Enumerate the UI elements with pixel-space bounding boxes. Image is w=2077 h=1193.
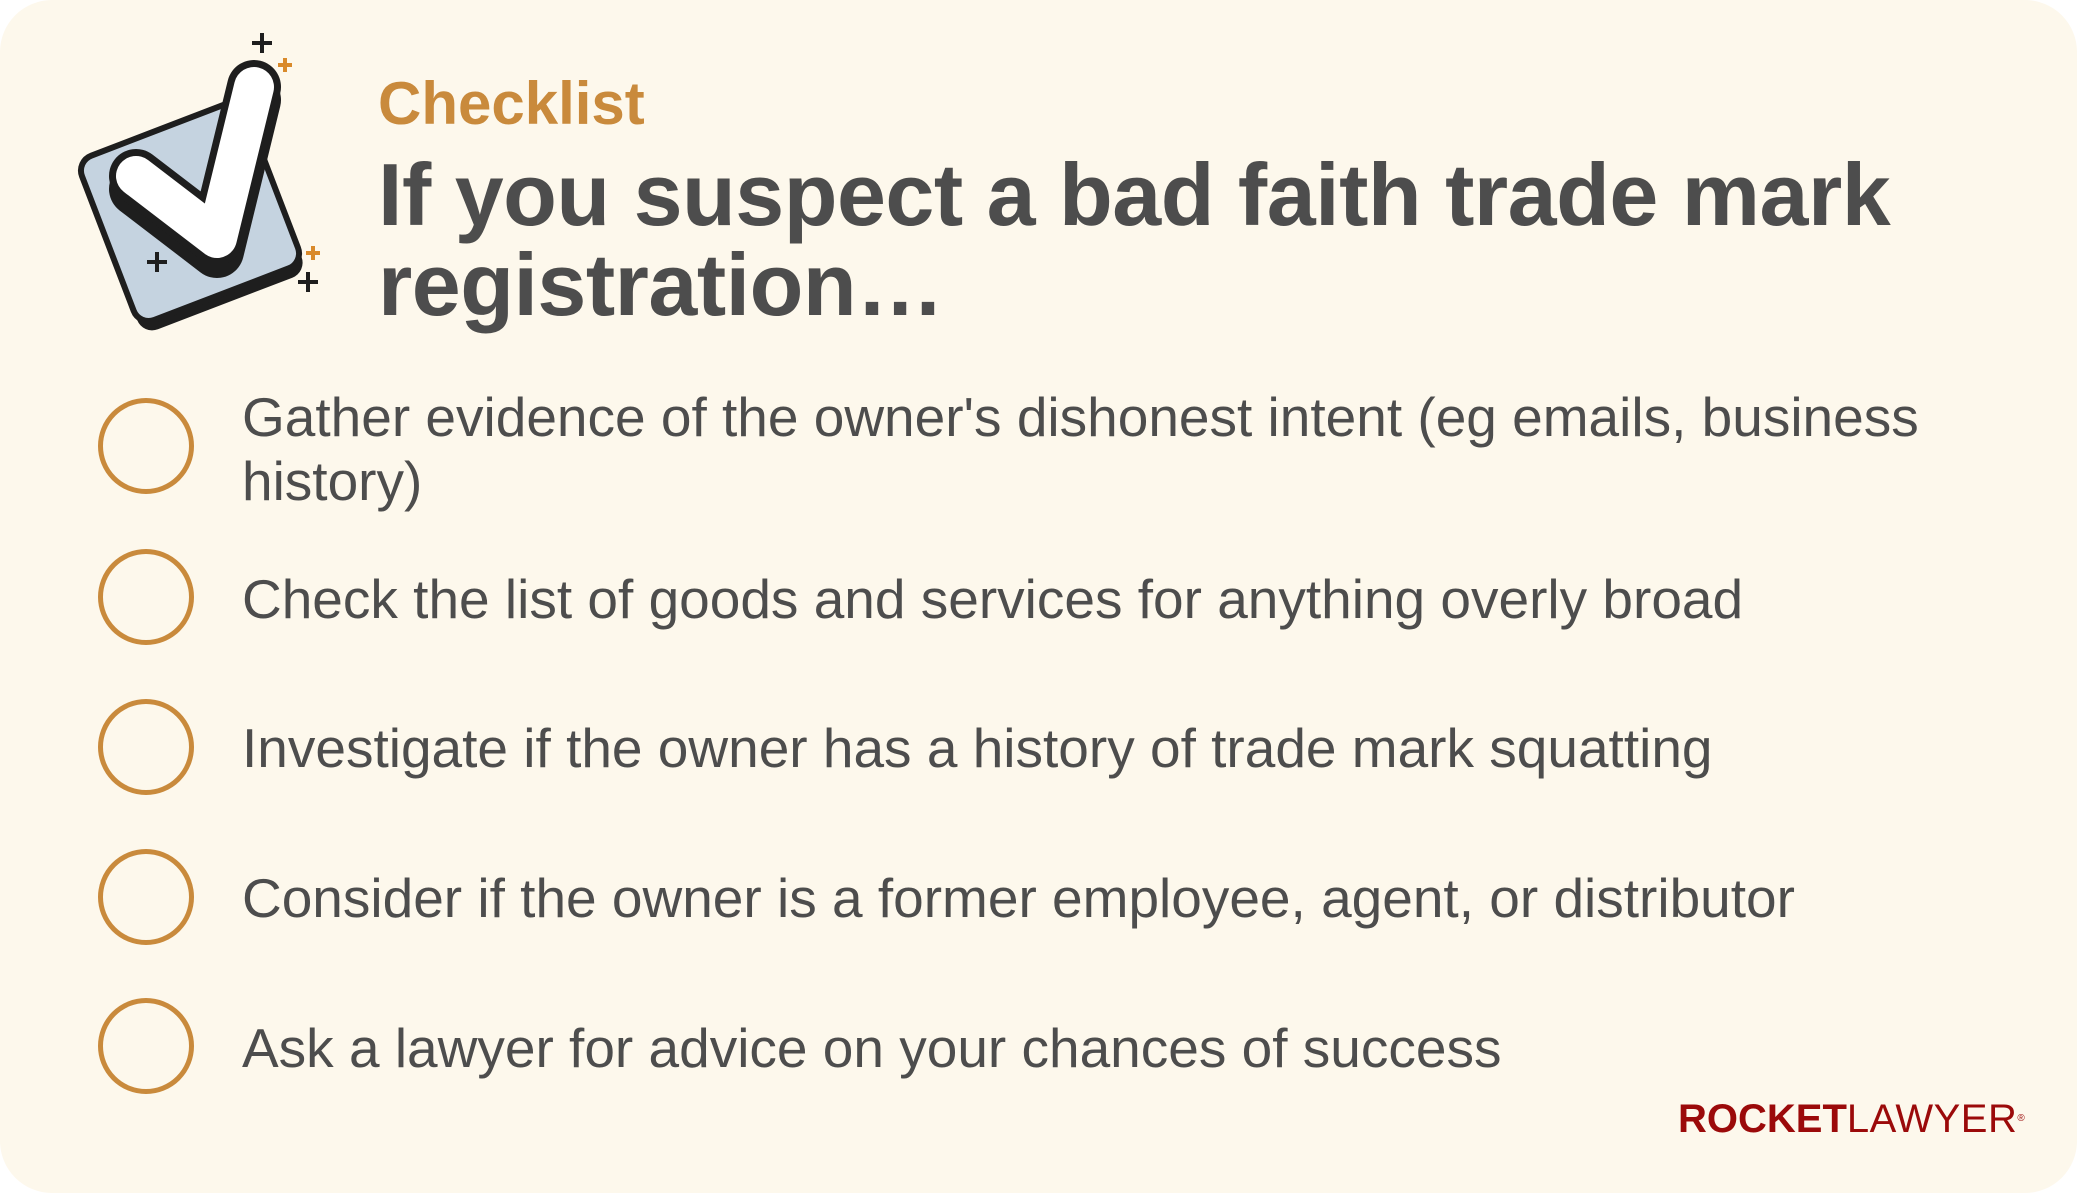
text: Gather evidence of the owner's dishonest intent (eg emails, business history) <box>242 386 1919 512</box>
text: Ask a lawyer for advice on your chances of success <box>242 1017 1501 1079</box>
title: registration… <box>378 235 944 334</box>
item 4 <box>98 849 1795 945</box>
item 2 <box>98 549 1743 645</box>
text: Check the list of goods and services for anything overly broad <box>242 568 1743 630</box>
item 1 <box>98 386 1919 512</box>
text: Consider if the owner is a former employee, agent, or distributor <box>242 867 1795 929</box>
item 5 <box>98 998 1501 1094</box>
title <box>378 145 1891 334</box>
title: If you suspect a bad faith trade mark <box>378 145 1890 244</box>
text: Investigate if the owner has a history of trade mark squatting <box>242 717 1712 779</box>
logo: Rocket Lawyer: ROCKETLAWYER® <box>1678 1097 2025 1141</box>
item 3 <box>98 699 1712 795</box>
icon: checkbox with checkmark <box>78 33 320 330</box>
subtitle: Checklist: Checklist <box>378 70 645 137</box>
